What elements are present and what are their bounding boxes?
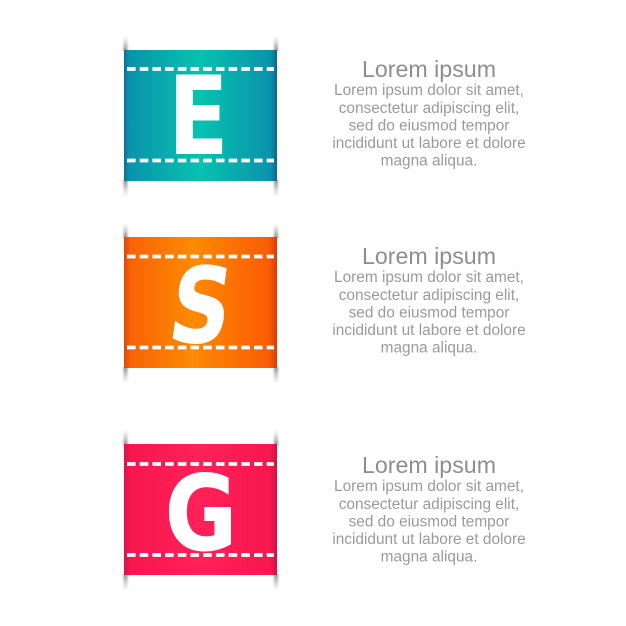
text block: G description: consectetur adipiscing elit,	[339, 496, 519, 513]
text block: G description: sed do eiusmod tempor	[349, 514, 509, 530]
text block: S description: magna aliqua.	[381, 340, 477, 356]
text block: S description: sed do eiusmod tempor	[349, 304, 509, 322]
text block: S description: incididunt ut labore et dolore	[332, 322, 526, 339]
text block: E description: Lorem ipsum	[362, 56, 496, 82]
text block: S description: consectetur adipiscing elit,	[339, 287, 519, 304]
text block: E description: consectetur adipiscing elit,	[339, 100, 519, 117]
letter S: S	[163, 245, 240, 367]
panel: S ribbon	[124, 223, 278, 384]
text block: E description: incididunt ut labore et dolore	[332, 135, 526, 152]
text block: S description	[332, 243, 526, 356]
text block: G description: Lorem ipsum dolor sit amet,	[334, 478, 524, 495]
text block: E description: magna aliqua.	[381, 152, 477, 170]
letter E: E	[168, 53, 229, 180]
text block: G description: incididunt ut labore et dolore	[332, 531, 526, 548]
panel: E ribbon	[124, 36, 278, 197]
letter G: G	[165, 454, 237, 574]
text block: E description: sed do eiusmod tempor	[349, 118, 509, 134]
text block: G description	[332, 452, 526, 566]
text block: S description: Lorem ipsum	[362, 243, 496, 269]
text block: G description: Lorem ipsum	[362, 452, 496, 478]
text block: G description: magna aliqua.	[381, 548, 477, 566]
panel: G ribbon	[124, 430, 278, 591]
text block: S description: Lorem ipsum dolor sit amet,	[334, 269, 524, 286]
text block: E description	[332, 56, 526, 170]
text block: E description: Lorem ipsum dolor sit amet,	[334, 82, 524, 99]
